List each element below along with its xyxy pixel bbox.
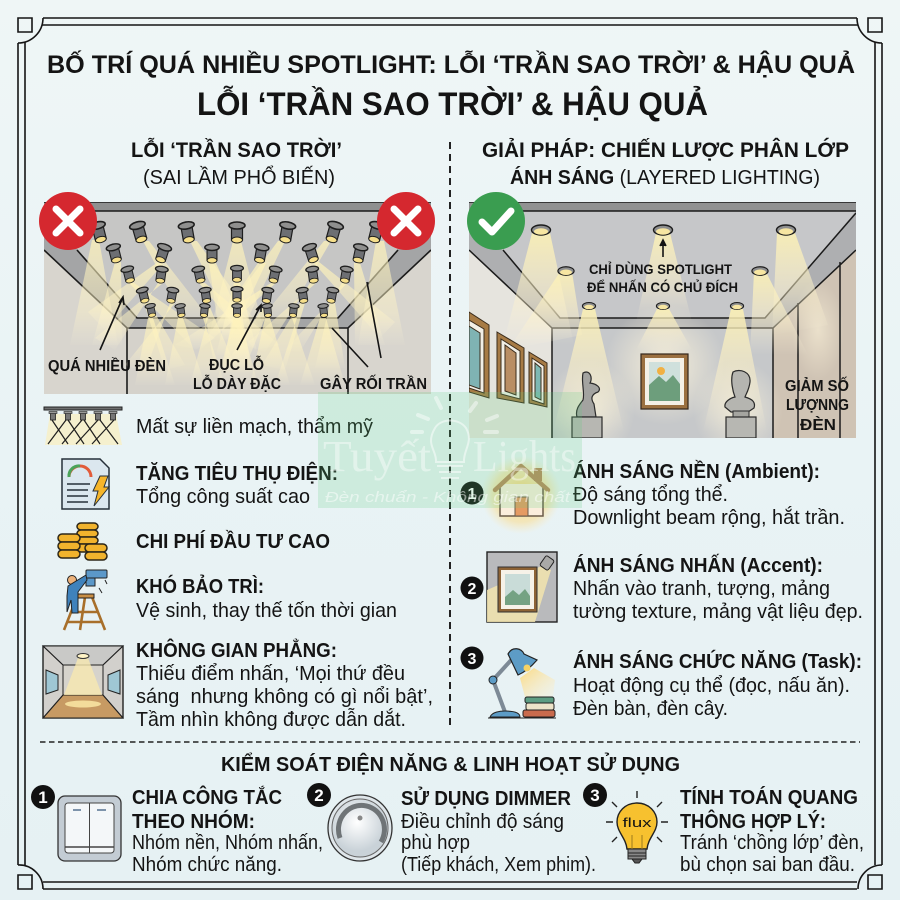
- heading: left column: LỖI ‘TRẦN SAO TRỜI’: [131, 138, 342, 162]
- spotlight fixtures: [89, 220, 386, 318]
- bust statue: [725, 370, 756, 438]
- heading: right column: ÁNH SÁNG (LAYERED LIGHTING): [510, 166, 820, 189]
- heading: left column: (SAI LẦM PHỔ BIẾN): [143, 165, 335, 189]
- item: flat space: KHÔNG GIAN PHẲNG:: [136, 638, 337, 662]
- icon: dimmer knob: 2: [314, 786, 324, 805]
- icon: framed picture with spotlight: 2: [468, 581, 477, 598]
- callout: too many lights: QUÁ NHIỀU ĐÈN: [48, 358, 166, 375]
- panel: split switches: Nhóm nền, Nhóm nhấn,: [132, 832, 323, 854]
- item: accent light: [460, 552, 863, 623]
- icon: flux bulb: 3: [590, 786, 600, 805]
- item: loss of seamlessness: Mất sự liền mạch, thẩm mỹ: [136, 416, 373, 438]
- item: higher power use: TĂNG TIÊU THỤ ĐIỆN:: [136, 461, 338, 485]
- sculpture: [572, 372, 602, 438]
- icon: dimmer knob: [307, 783, 392, 861]
- center framed picture: [641, 354, 688, 409]
- icon: mini ceiling: [44, 407, 122, 445]
- watermark: Đèn chuẩn - Không gian chất: [325, 489, 571, 506]
- panel: split switches: [31, 785, 323, 876]
- item: task light: [460, 646, 862, 720]
- callout: dense holes: [193, 305, 281, 393]
- heading: right column: GIẢI PHÁP: CHIẾN LƯỢC PHÂN LỚP: [482, 138, 849, 162]
- icon: desk lamp and books: 3: [468, 651, 477, 668]
- callout: spotlight purpose: ĐỂ NHẤN CÓ CHỦ ĐÍCH: [587, 278, 738, 295]
- item: hard to maintain: [64, 570, 397, 630]
- icon: flux bulb: [583, 783, 668, 863]
- callout: too many lights: [48, 297, 166, 375]
- wall paintings left: [469, 312, 547, 407]
- item: accent light: Nhấn vào tranh, tượng, mảng: [573, 578, 830, 600]
- light beams: [70, 240, 405, 385]
- callout: spotlight purpose: CHỈ DÙNG SPOTLIGHT: [589, 260, 732, 277]
- panel: lumen calculation: Tránh ‘chồng lớp’ đèn,: [680, 832, 864, 854]
- icon: house with glow: [460, 456, 561, 534]
- panel: lumen calculation: bù chọn sai ban đầu.: [680, 854, 855, 876]
- item: flat space: Tầm nhìn không được dẫn dắt.: [136, 708, 406, 731]
- icon: desk lamp and books: [460, 646, 556, 718]
- light beams: [512, 233, 823, 411]
- panel: split switches: CHIA CÔNG TẮC: [132, 785, 282, 809]
- item: ambient light: Độ sáng tổng thể.: [573, 484, 728, 506]
- item: higher power use: Tổng công suất cao: [136, 486, 310, 508]
- heading: energy control: KIỂM SOÁT ĐIỆN NĂNG & LINH HOẠT SỬ DỤNG: [221, 752, 680, 776]
- panel: dimmer: (Tiếp khách, Xem phim).: [401, 854, 596, 876]
- callout: reduce lights: ĐÈN: [800, 415, 836, 434]
- center column divider: [449, 142, 451, 730]
- item: task light: Hoạt động cụ thể (đọc, nấu ăn).: [573, 675, 850, 697]
- item: hard to maintain: Vệ sinh, thay thế tốn thời gian: [136, 600, 397, 622]
- icon: flux bulb: flux: [622, 815, 652, 830]
- icon: bill with lightning: [62, 459, 109, 509]
- title: BỐ TRÍ QUÁ NHIỀU SPOTLIGHT: LỖI ‘TRẦN SAO TRỜI’ & HẬU QUẢ: [47, 49, 855, 79]
- item: flat space: sáng nhưng không có gì nổi bật’,: [136, 686, 433, 708]
- panel: lighting layers list: [460, 456, 863, 720]
- icon: room: [43, 646, 123, 718]
- item: hard to maintain: KHÓ BẢO TRÌ:: [136, 574, 264, 598]
- item: flat space: [43, 638, 433, 731]
- callout: messy ceiling: GÂY RỐI TRẦN: [320, 375, 427, 393]
- item: ambient light: ÁNH SÁNG NỀN (Ambient):: [573, 460, 820, 483]
- panel: star-ceiling illustration (wrong): [39, 192, 435, 394]
- heading: right column: [482, 138, 849, 189]
- item: ambient light: Downlight beam rộng, hắt trần.: [573, 506, 845, 529]
- icon: double light switch: 1: [38, 788, 48, 807]
- panel: lumen calculation: [583, 783, 864, 876]
- panel: split switches: Nhóm chức năng.: [132, 854, 282, 876]
- watermark: Lights: [473, 432, 576, 481]
- title: LỖI ‘TRẦN SAO TRỜI’ & HẬU QUẢ: [197, 86, 708, 122]
- callout: messy ceiling: [320, 282, 427, 393]
- callout: dense holes: LỖ DÀY ĐẶC: [193, 375, 281, 393]
- item: accent light: ÁNH SÁNG NHẤN (Accent):: [573, 554, 823, 577]
- icon: red cross left: [39, 192, 97, 250]
- item: accent light: tường texture, mảng vật liệu đẹp.: [573, 601, 863, 623]
- icon: framed picture with spotlight: [460, 552, 557, 622]
- item: high investment cost: [58, 523, 330, 560]
- panel: layered lighting illustration (right): [467, 192, 856, 460]
- item: flat space: Thiếu điểm nhấn, ‘Mọi thứ đều: [136, 663, 405, 685]
- icon: red cross right: [377, 192, 435, 250]
- icon: green check: [467, 192, 525, 250]
- item: high investment cost: CHI PHÍ ĐẦU TƯ CAO: [136, 530, 330, 553]
- item: higher power use: [62, 459, 338, 509]
- watermark: Tuyết: [323, 432, 431, 481]
- icon: house with glow: 1: [468, 486, 477, 503]
- watermark: [318, 392, 582, 508]
- panel: dimmer: [307, 783, 596, 876]
- callout: spotlight purpose: [587, 240, 738, 295]
- item: task light: ÁNH SÁNG CHỨC NĂNG (Task):: [573, 649, 862, 673]
- item: loss of seamlessness: [44, 407, 373, 445]
- panel: lumen calculation: THÔNG HỢP LÝ:: [680, 809, 826, 833]
- callout: dense holes: ĐỤC LỖ: [209, 356, 264, 374]
- icon: double light switch: [31, 785, 121, 861]
- downlights: [532, 225, 796, 310]
- panel: split switches: THEO NHÓM:: [132, 809, 255, 833]
- heading: left column: [131, 138, 342, 189]
- icon: person on ladder: [64, 570, 107, 630]
- callout: reduce lights: GIẢM SỐ: [785, 375, 849, 395]
- title: [47, 49, 855, 122]
- horizontal divider: [40, 741, 860, 743]
- icon: gold coins: [58, 523, 107, 560]
- panel: dimmer: Điều chỉnh độ sáng: [401, 811, 564, 833]
- panel: dimmer: SỬ DỤNG DIMMER: [401, 786, 572, 810]
- callout: reduce lights: LƯỢNNG: [786, 397, 849, 414]
- panel: consequences list: [43, 407, 433, 731]
- callout: reduce lights: [785, 375, 849, 434]
- item: ambient light: [460, 456, 845, 534]
- panel: dimmer: phù hợp: [401, 832, 470, 854]
- panel: lumen calculation: TÍNH TOÁN QUANG: [680, 786, 858, 809]
- item: task light: Đèn bàn, đèn cây.: [573, 698, 728, 720]
